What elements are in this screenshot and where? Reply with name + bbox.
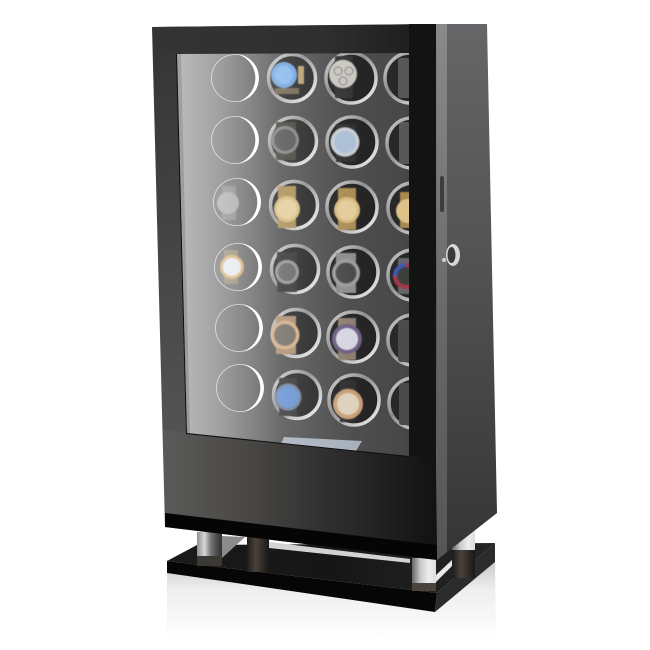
watch: dark steel [275, 252, 299, 292]
watch: white and gold [220, 250, 244, 284]
gloss black band [165, 513, 437, 560]
lower panel [163, 430, 437, 545]
lock [442, 244, 460, 266]
base plate [167, 536, 495, 612]
glass window [176, 53, 409, 457]
back right leg [452, 530, 475, 578]
watch: gold bracelet [334, 188, 360, 230]
watch: gold bracelet [274, 186, 300, 228]
watch: steel diver [332, 253, 360, 293]
watch: rose gold [270, 316, 300, 354]
watch: multicolour bezel [392, 258, 409, 294]
watch: silver-blue dial [330, 124, 360, 162]
reflection under cabinet [222, 536, 245, 558]
row 3 slots [214, 178, 438, 233]
cabinet front face [152, 24, 437, 560]
cabinet side panel [436, 24, 497, 560]
glass haze [177, 54, 355, 447]
watch: grey dial [271, 122, 299, 160]
row 1 slots [212, 53, 435, 103]
row 6 slots [216, 364, 409, 430]
back left leg [197, 532, 222, 566]
right frame [409, 24, 436, 554]
winder display [281, 437, 362, 451]
watch: white chronograph [329, 56, 357, 98]
watch: champagne chronograph [333, 380, 363, 422]
watch: gold clipped [395, 191, 409, 229]
illustration: watch winder cabinet [152, 24, 497, 616]
side slot [440, 176, 444, 212]
watch: blue dial [271, 62, 304, 94]
watch: faded silver [217, 186, 239, 220]
row 4 slots [214, 243, 409, 302]
row 5 slots [215, 304, 409, 366]
floor shadow [167, 562, 496, 640]
watches [217, 56, 420, 422]
row 2 slots [212, 116, 437, 168]
watch: blue sport [274, 378, 302, 416]
front right leg [412, 558, 436, 591]
back centre leg [247, 536, 269, 572]
watch: purple bezel [332, 318, 362, 360]
top frame band [153, 24, 436, 54]
